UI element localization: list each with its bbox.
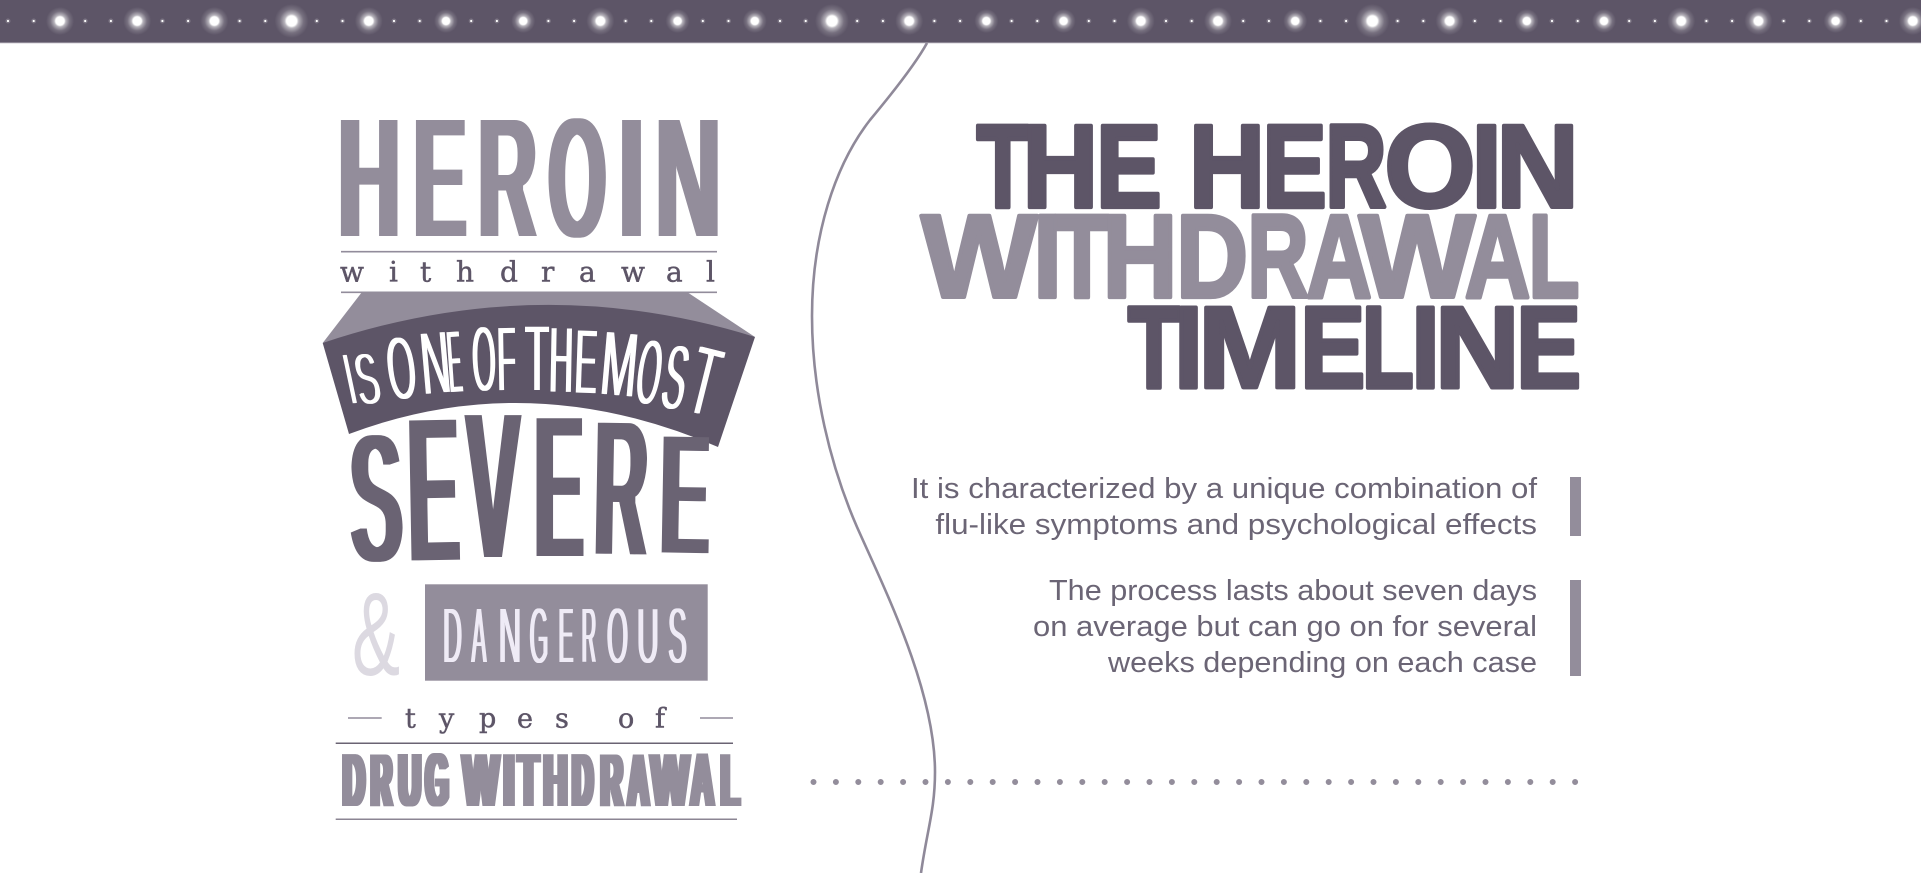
ribbon with text: is one of the most: O [381, 316, 421, 420]
title line: THE HEROIN: O [1384, 101, 1476, 232]
title line: WITHDRAWAL: A [1306, 192, 1372, 323]
text block: duration: The process lasts about seven days [1049, 575, 1537, 607]
ribbon with text: is one of the most: F [496, 306, 517, 411]
box: dangerous [425, 584, 708, 681]
box: dangerous: O [607, 591, 628, 680]
ribbon with text: is one of the most [323, 305, 755, 447]
heading: DRUG WITHDRAWAL between rules: H [544, 738, 567, 823]
box: dangerous: D [443, 590, 462, 680]
heading: SEVERE: V [466, 367, 520, 606]
heading: DRUG WITHDRAWAL between rules: L [721, 739, 739, 823]
title line: TIMELINE: L [1362, 282, 1414, 412]
title line: WITHDRAWAL: H [1103, 192, 1177, 322]
title line: WITHDRAWAL: A [1465, 192, 1530, 323]
title line: WITHDRAWAL [921, 190, 1579, 323]
ribbon with text: is one of the most: O [631, 318, 668, 426]
heading: DRUG WITHDRAWAL between rules: D [572, 738, 593, 823]
ribbon with text: is one of the most: T [525, 306, 549, 412]
title line: THE HEROIN: R [1325, 100, 1387, 232]
text block: characterization [911, 473, 1581, 541]
ribbon with text: is one of the most: O [470, 306, 497, 412]
box: dangerous: E [559, 592, 573, 681]
heading: DRUG WITHDRAWAL between rules: R [601, 739, 623, 823]
text block: duration: on average but can go on for several [1033, 611, 1537, 643]
top lights banner [0, 0, 1921, 43]
heading: SEVERE: E [406, 371, 461, 609]
title line: WITHDRAWAL: R [1247, 190, 1309, 322]
ribbon with text: is one of the most: N [417, 311, 454, 414]
title line: WITHDRAWAL: T [1055, 191, 1109, 323]
text block: duration: weeks depending on each case [1107, 647, 1537, 679]
box: dangerous: G [530, 591, 548, 681]
title line: THE HEROIN: E [1096, 101, 1162, 232]
words: types of: types of [405, 703, 667, 734]
heading: DRUG WITHDRAWAL between rules: D [343, 739, 365, 823]
box: dangerous: A [472, 592, 487, 681]
title line: TIMELINE [1128, 282, 1581, 413]
title line: WITHDRAWAL: L [1529, 191, 1579, 322]
title line: THE HEROIN [977, 100, 1579, 233]
heading: DRUG WITHDRAWAL between rules: I [503, 738, 515, 822]
ribbon with text: is one of the most: M [597, 311, 642, 418]
title line: THE HEROIN: H [1189, 101, 1265, 232]
ampersand: & [352, 569, 400, 700]
heading: DRUG WITHDRAWAL between rules: A [691, 739, 714, 823]
heading: HEROIN: I [619, 82, 644, 276]
heading: SEVERE [348, 367, 711, 609]
panel: typographic statement [323, 80, 755, 823]
main title [921, 100, 1581, 413]
heading: DRUG WITHDRAWAL between rules: G [426, 739, 448, 823]
heading: DRUG WITHDRAWAL between rules: R [371, 739, 392, 823]
text block: characterization: It is characterized by a unique combination of [911, 473, 1538, 505]
heading: SEVERE: R [593, 376, 650, 600]
heading: HEROIN [338, 80, 721, 276]
heading: HEROIN: E [414, 80, 466, 275]
ribbon with text: is one of the most: H [548, 308, 574, 414]
heading: HEROIN: O [548, 82, 606, 276]
title line: TIMELINE: T [1128, 283, 1180, 412]
title line: THE HEROIN: H [1023, 100, 1098, 232]
box: dangerous: N [499, 590, 521, 680]
title line: WITHDRAWAL: W [1359, 190, 1475, 322]
ribbon with text: is one of the most: I [337, 337, 362, 420]
text block: characterization: flu-like symptoms and psychological effects [935, 509, 1537, 541]
ribbon back fold [323, 292, 755, 345]
heading: HEROIN: R [478, 80, 537, 275]
heading: DRUG WITHDRAWAL between rules: U [399, 739, 421, 823]
box: dangerous: S [668, 591, 687, 680]
heading: HEROIN: H [338, 82, 400, 276]
title line: THE HEROIN: E [1262, 101, 1327, 232]
heading: HEROIN: N [656, 81, 721, 276]
heading: DRUG WITHDRAWAL between rules: W [651, 737, 689, 822]
ribbon with text: is one of the most: E [573, 309, 599, 414]
heading: DRUG WITHDRAWAL between rules: T [518, 739, 539, 823]
timeline curve [812, 43, 935, 873]
title line: TIMELINE: E [1516, 282, 1581, 412]
title line: THE HEROIN: I [1471, 101, 1502, 233]
title line: TIMELINE: I [1174, 284, 1203, 413]
title line: TIMELINE: M [1198, 283, 1302, 412]
ribbon with text: is one of the most: S [655, 325, 696, 431]
title line: TIMELINE: N [1435, 282, 1520, 412]
heading: DRUG WITHDRAWAL between rules: W [463, 738, 499, 822]
ribbon with text: is one of the most: S [349, 337, 386, 422]
heading: DRUG WITHDRAWAL between rules: A [628, 739, 649, 823]
ribbon with text: is one of the most: T [678, 326, 731, 439]
box: dangerous: R [582, 592, 596, 681]
title line: WITHDRAWAL: I [1033, 192, 1062, 323]
title line: THE HEROIN: N [1496, 101, 1579, 232]
title line: WITHDRAWAL: W [921, 190, 1038, 322]
heading: SEVERE: S [348, 394, 404, 604]
ribbon with text: is one of the most: E [444, 311, 465, 412]
heading: SEVERE: E [659, 394, 711, 594]
title line: WITHDRAWAL: D [1176, 191, 1248, 323]
title line: THE HEROIN: T [977, 101, 1029, 232]
text block: duration [1033, 575, 1581, 679]
heading: DRUG WITHDRAWAL between rules [336, 737, 739, 823]
word: withdrawal between rules: withdrawal [340, 256, 715, 289]
dotted divider [814, 779, 1578, 785]
title line: TIMELINE: E [1300, 282, 1365, 412]
heading: SEVERE: E [535, 371, 583, 604]
box: dangerous: U [637, 590, 659, 680]
title line: TIMELINE: I [1411, 284, 1440, 413]
